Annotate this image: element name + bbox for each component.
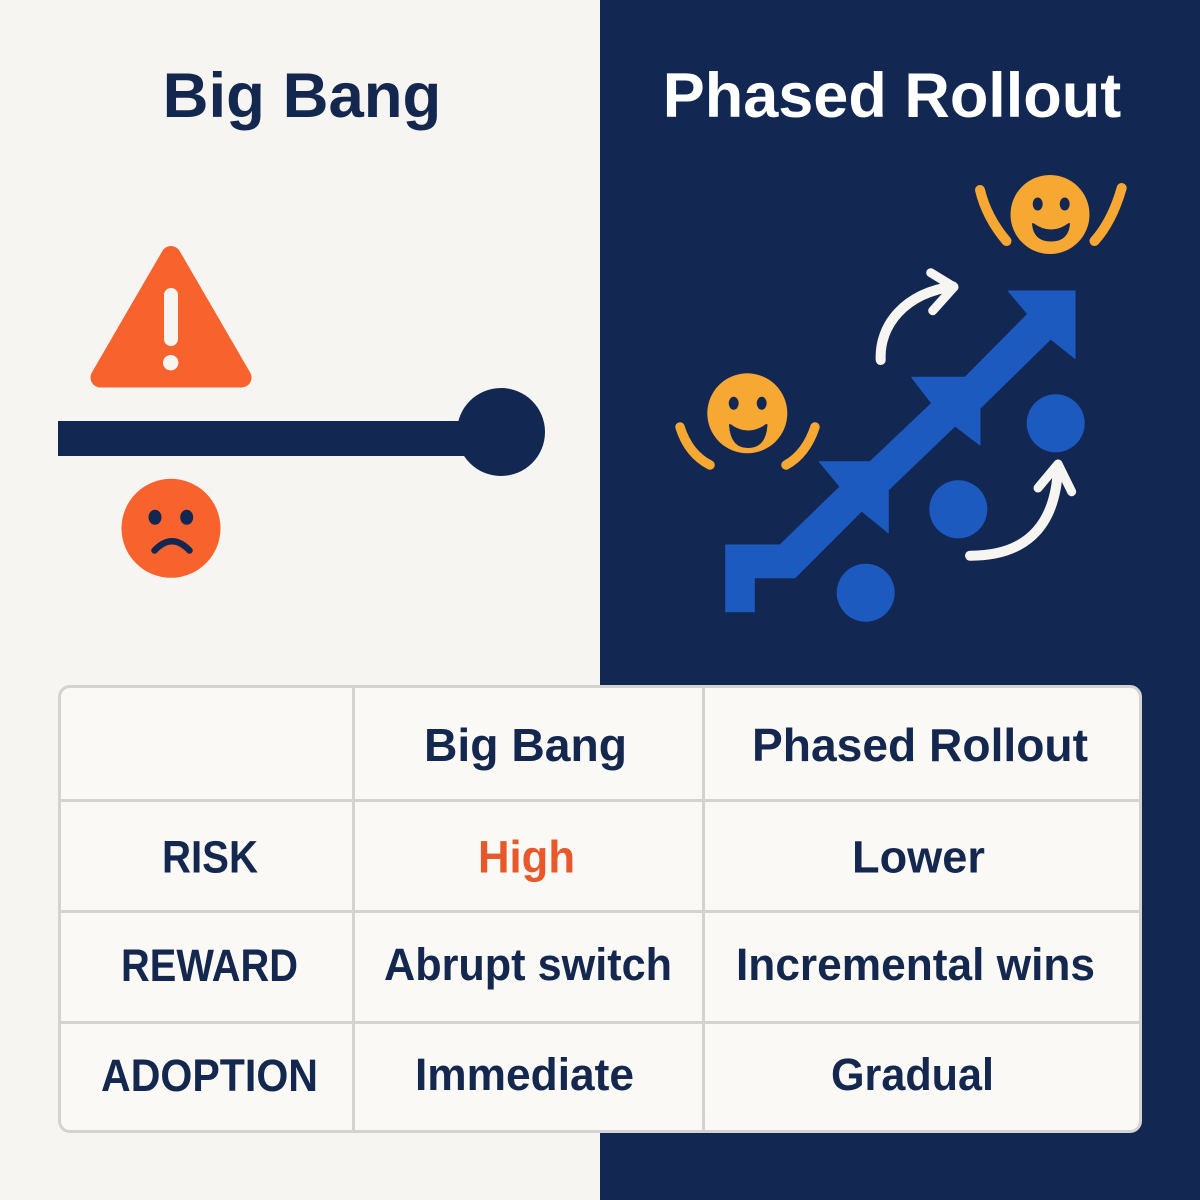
row label: REWARD: REWARD [121,940,298,991]
icon: curved arrow upper [881,273,954,360]
icon: happy face lower [680,373,815,465]
cell: Incremental wins: Incremental wins [736,939,1095,990]
panel: phased rollout background [600,0,1200,1200]
icon: blue dot 2 [929,480,987,538]
table header: Phased Rollout: Phased Rollout [752,719,1088,771]
heading: Big Bang: Big Bang [163,61,441,131]
row label: RISK: RISK [162,832,258,882]
icon: happy face upper [980,175,1122,254]
row label: ADOPTION: ADOPTION [101,1050,318,1101]
table row divider 3 [61,1021,1139,1024]
illustration: phased rollout [675,175,1127,622]
heading: Phased Rollout: Phased Rollout [663,61,1121,131]
icon: curved arrow lower [970,464,1072,556]
table header: Big Bang: Big Bang [424,719,627,771]
icon: stepped growth arrow [726,291,1075,612]
icon: blue dot 3 [1027,394,1085,452]
icon: big bang timeline [58,388,545,476]
icon: warning triangle [100,256,242,378]
cell: Abrupt switch: Abrupt switch [384,939,672,990]
cell: Immediate: Immediate [415,1049,634,1100]
cell: Gradual: Gradual [831,1049,994,1100]
icon: blue dot 1 [837,564,895,622]
cell: Lower: Lower [852,832,985,882]
illustration: big bang [58,246,545,578]
table column divider 1 [352,688,355,1130]
cell: High: High [478,832,575,882]
icon: sad face [122,479,220,578]
table column divider 2 [702,688,705,1130]
panel: comparison table [58,685,1142,1133]
table row divider 2 [61,910,1139,913]
table row divider 1 [61,799,1139,802]
